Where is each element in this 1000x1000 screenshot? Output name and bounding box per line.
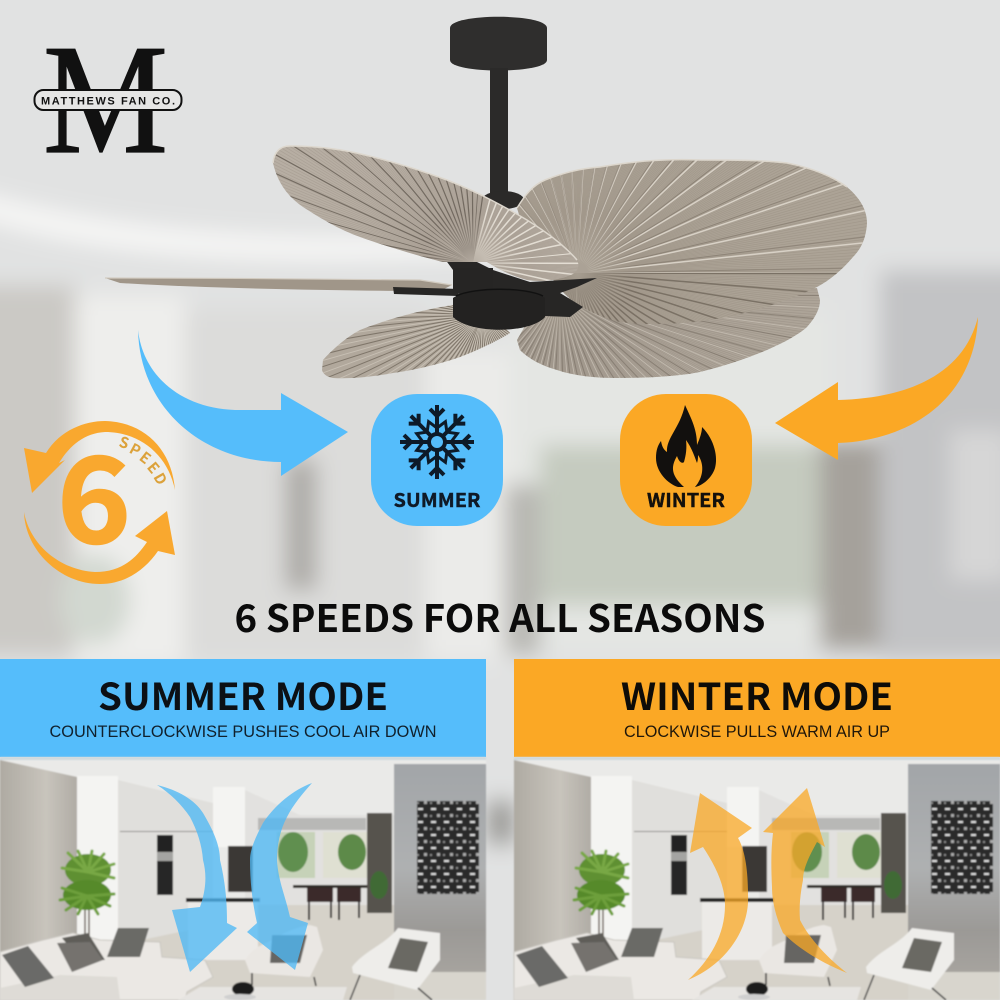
badge speed label: D xyxy=(149,469,172,489)
arrow: blue summer xyxy=(138,330,348,476)
badge speed label: E xyxy=(135,446,155,469)
logo name pill xyxy=(34,90,182,110)
blade: thin left xyxy=(105,278,452,291)
winter subtitle: CLOCKWISE PULLS WARM AIR UP xyxy=(624,723,890,741)
speed badge xyxy=(24,406,175,584)
summer subtitle: COUNTERCLOCKWISE PUSHES COOL AIR DOWN xyxy=(50,723,436,741)
logo monogram M: M xyxy=(43,12,168,186)
logo xyxy=(34,12,182,186)
blade: large right xyxy=(516,159,867,324)
ceiling fan xyxy=(105,0,880,595)
fan mounting arms xyxy=(393,255,597,317)
air arrow down left xyxy=(157,785,237,972)
badge speed label: P xyxy=(126,438,145,461)
panel: winter header xyxy=(514,659,1000,757)
winter heading: WINTER MODE xyxy=(621,667,893,721)
winter tile xyxy=(620,394,752,526)
air arrow up left xyxy=(688,793,752,980)
title: 6 SPEEDS FOR ALL SEASONS xyxy=(234,588,766,643)
fan motor housing xyxy=(453,268,545,330)
panel: summer room photo xyxy=(0,757,486,1000)
summer label: SUMMER xyxy=(394,486,481,513)
arrow: orange winter xyxy=(775,317,978,460)
air arrow down right xyxy=(247,783,312,970)
blade: rear lower right xyxy=(517,288,820,378)
badge arrow top xyxy=(24,421,175,493)
blade: lower left xyxy=(322,305,510,378)
badge arrow bottom xyxy=(24,511,175,584)
icon: snowflake xyxy=(400,405,474,479)
panel: winter room photo xyxy=(514,757,1000,1000)
summer heading: SUMMER MODE xyxy=(98,667,388,721)
summer air arrows xyxy=(157,783,312,972)
badge speed label: S xyxy=(116,431,132,454)
badge speed label xyxy=(116,431,172,489)
summer tile xyxy=(371,394,503,526)
panel: summer header xyxy=(0,659,486,757)
winter label: WINTER xyxy=(647,486,725,513)
badge speed label: E xyxy=(142,457,164,478)
logo name pill: MATTHEWS FAN CO. xyxy=(41,96,175,108)
winter air arrows xyxy=(688,788,847,980)
fan collar xyxy=(482,191,524,209)
fan downrod xyxy=(490,68,508,198)
fan canopy xyxy=(450,17,547,70)
icon: flame xyxy=(656,405,716,487)
badge number: 6 xyxy=(57,406,131,578)
blade: top left xyxy=(272,145,578,281)
air arrow up right xyxy=(763,788,847,973)
